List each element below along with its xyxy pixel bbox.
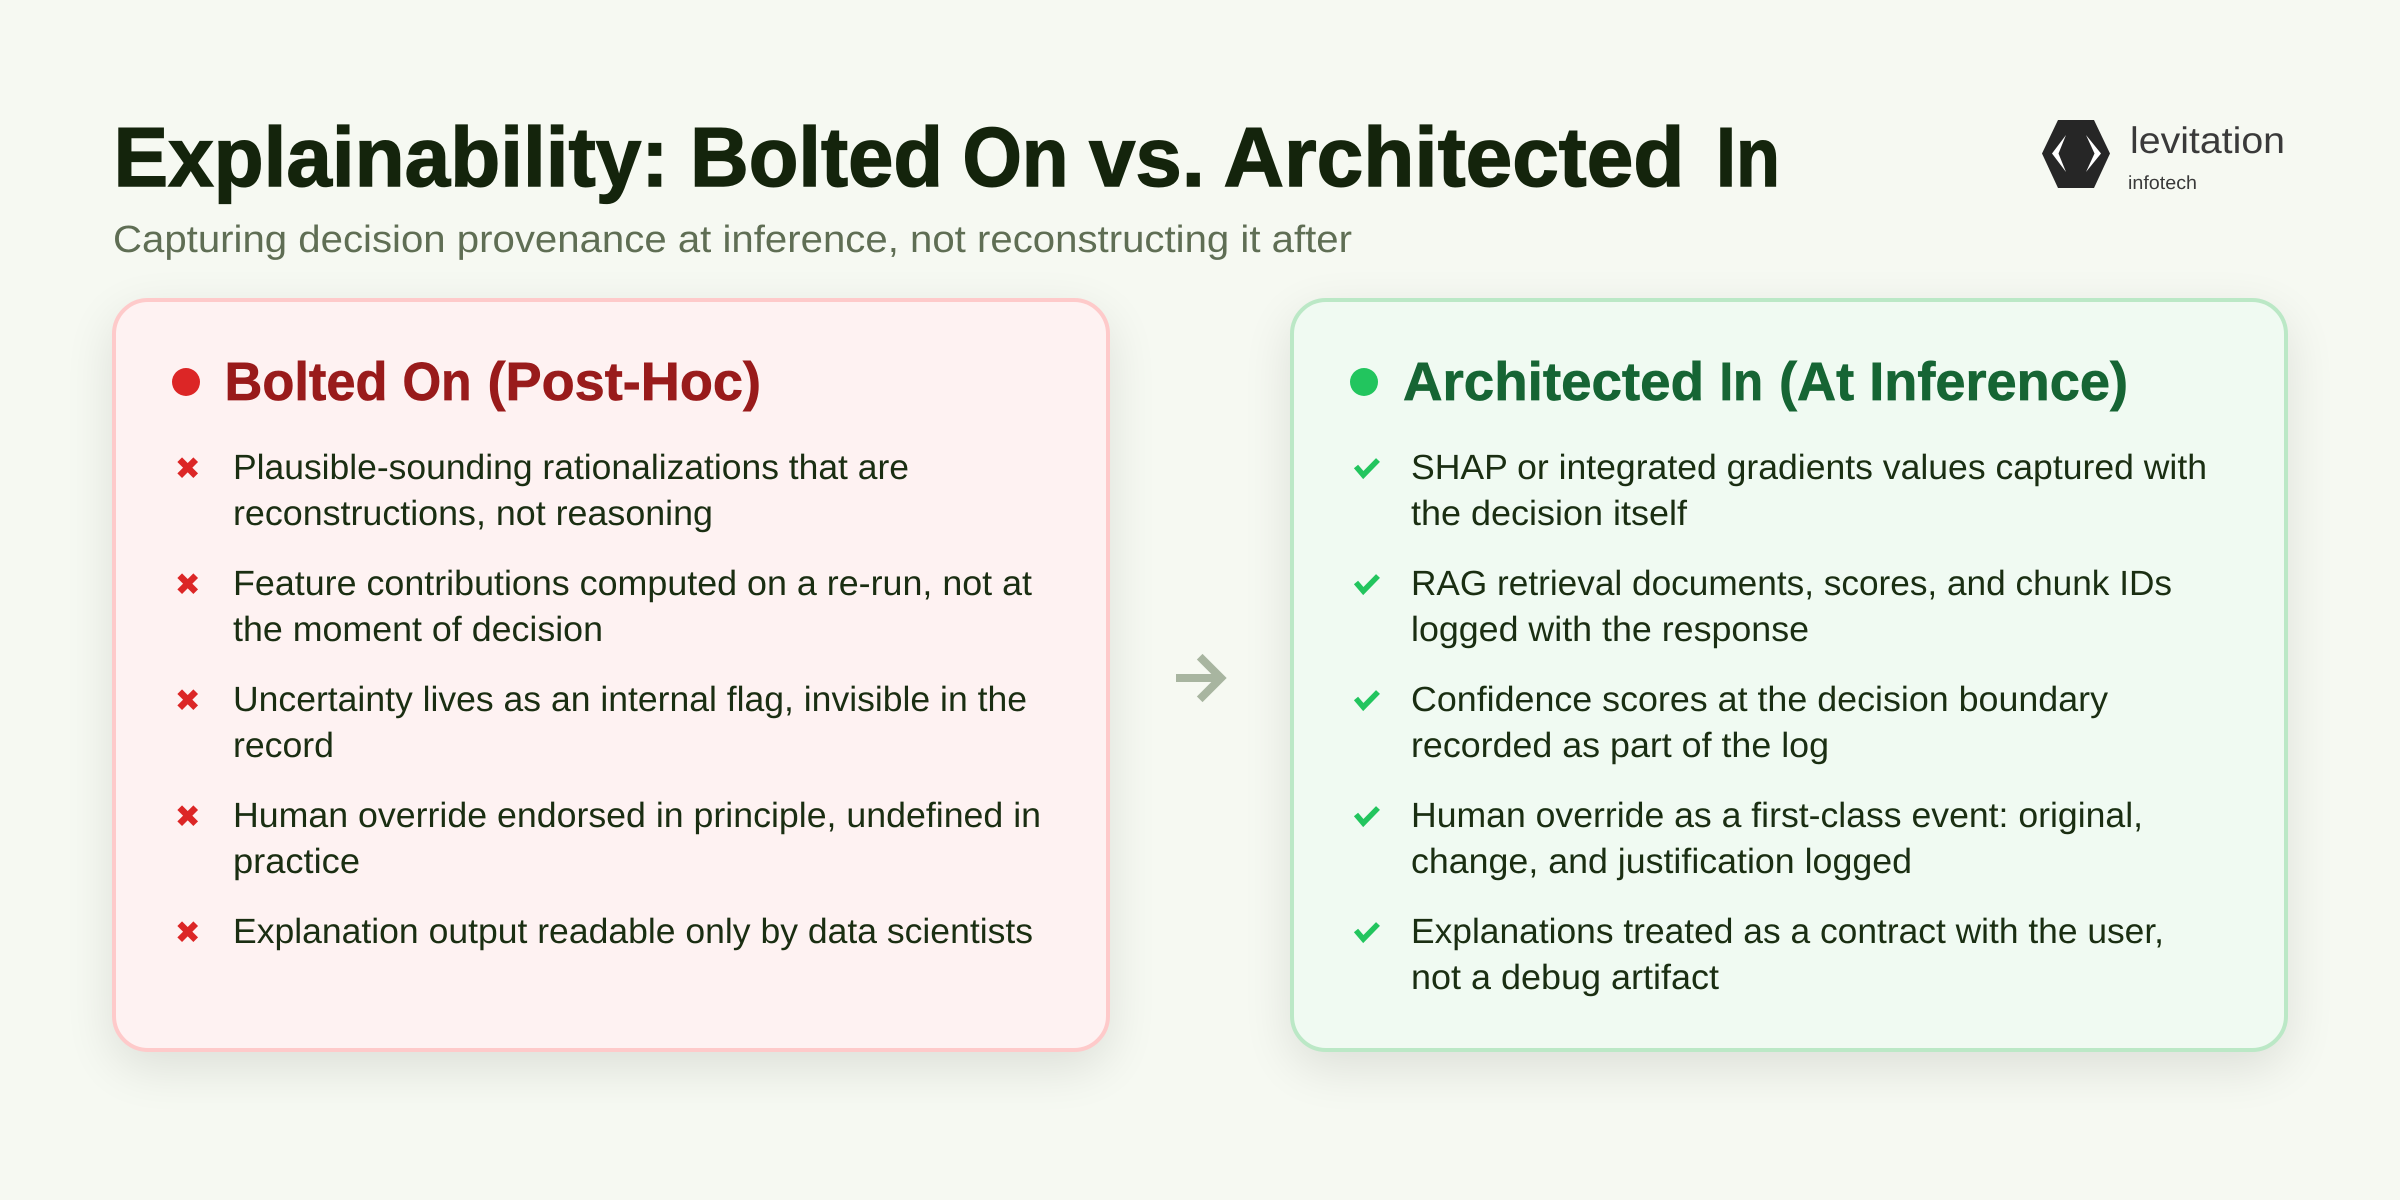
title: Explainability: <box>114 110 668 204</box>
item 4 <box>1356 796 2143 881</box>
item 1: the decision itself <box>1411 494 1687 533</box>
item 1 <box>1356 448 2207 533</box>
logo <box>2042 120 2285 194</box>
icon: green dot <box>1350 368 1378 396</box>
panel heading <box>224 352 761 412</box>
item 4: practice <box>233 842 360 881</box>
item 2: Feature contributions computed on a re-run, not at <box>233 564 1032 603</box>
arrow <box>1176 657 1221 699</box>
title: Bolted <box>690 110 943 204</box>
item 3: Confidence scores at the decision boundary <box>1411 680 2109 719</box>
item 3: recorded as part of the log <box>1411 726 1829 765</box>
item 4: Human override endorsed in principle, undefined in <box>233 796 1041 835</box>
item 2: RAG retrieval documents, scores, and chunk IDs <box>1411 564 2172 603</box>
panel: architected in <box>1290 300 2288 1068</box>
title: vs. <box>1089 110 1205 204</box>
logo tagline: infotech <box>2128 173 2197 194</box>
item 3: Uncertainty lives as an internal flag, invisible in the <box>233 680 1027 719</box>
item 4: Human override as a first-class event: original, <box>1411 796 2143 835</box>
item 3 <box>180 680 1027 765</box>
item 1 <box>180 448 909 533</box>
panel: bolted on <box>112 300 1110 1068</box>
item 5: Explanations treated as a contract with the user, <box>1411 912 2164 951</box>
item 5 <box>1356 912 2164 997</box>
icon: red dot <box>172 368 200 396</box>
item 2: the moment of decision <box>233 610 603 649</box>
panel heading: Architected <box>1403 352 1704 412</box>
panel heading: In <box>1720 352 1763 412</box>
title <box>114 110 1780 204</box>
panel heading: (At Inference) <box>1779 352 2128 412</box>
item 4 <box>180 796 1041 881</box>
item 5: Explanation output readable only by data scientists <box>233 912 1033 951</box>
item 3: record <box>233 726 334 765</box>
subtitle: Capturing decision provenance at inference, not reconstructing it after <box>113 219 1352 261</box>
title: In <box>1716 110 1780 204</box>
title: On <box>962 110 1068 204</box>
title: Architected <box>1224 110 1684 204</box>
item 5: not a debug artifact <box>1411 958 1719 997</box>
panel heading: Bolted <box>224 352 388 412</box>
logo wordmark: levitation <box>2130 120 2285 161</box>
item 4: change, and justification logged <box>1411 842 1912 881</box>
item 1: Plausible-sounding rationalizations that are <box>233 448 909 487</box>
item 1: reconstructions, not reasoning <box>233 494 713 533</box>
item 2 <box>180 564 1032 649</box>
panel heading: On <box>402 352 472 412</box>
icon: hexagon logo mark <box>2042 120 2110 188</box>
panel heading <box>1403 352 2128 412</box>
item 3 <box>1356 680 2109 765</box>
panel heading: (Post-Hoc) <box>488 352 761 412</box>
item 2: logged with the response <box>1411 610 1809 649</box>
item 1: SHAP or integrated gradients values captured with <box>1411 448 2207 487</box>
item 2 <box>1356 564 2172 649</box>
